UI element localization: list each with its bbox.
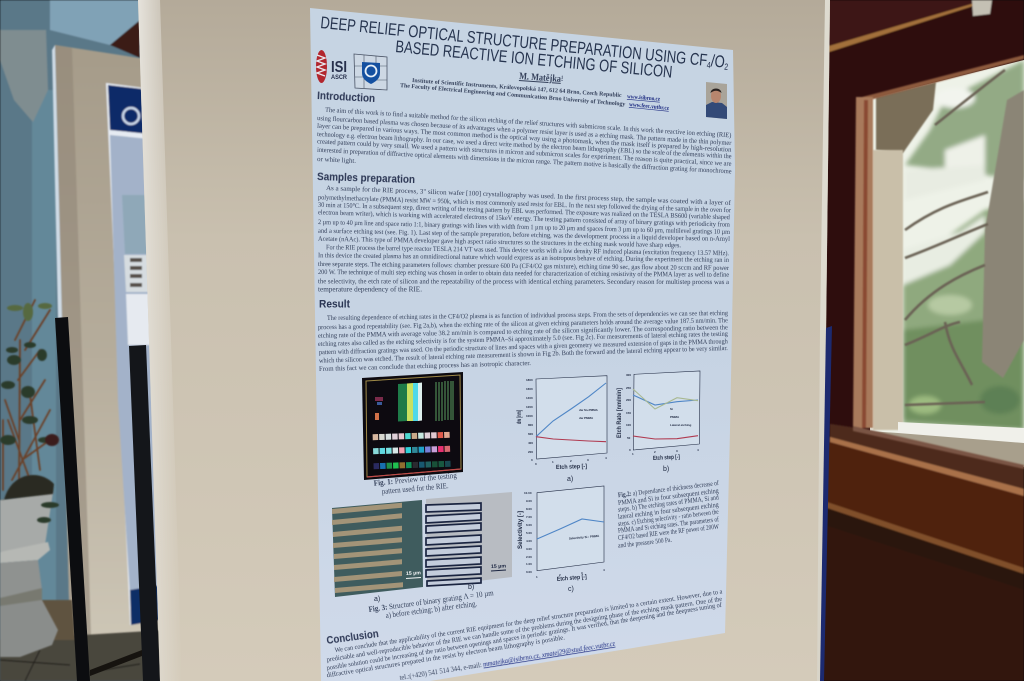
text: introduction: The aim of this work is to find a suitable method for the silicon etching of the relief structures with submicron scale. In this work the reactive ion etching (RIE) bbox=[325, 107, 732, 139]
figure 3 caption: Fig. 3: Structure of binary grating Λ = 10 µm bbox=[368, 588, 495, 614]
window view bbox=[870, 60, 1024, 467]
text: conclusion: diffractive optical structures prepared in the resist by electron beam lithography is possible. bbox=[326, 634, 566, 679]
figure 3a: before etching: 15 µm bbox=[406, 570, 422, 577]
contact line: tel.:(+420) 541 514 344, e-mail: mmatejka@isibrno.cz, xmatej29@stud.feec.vutbr.cz bbox=[399, 641, 616, 681]
affiliations: The Faculty of Electrical Engineering and Communication Brno University of Technology bbox=[400, 83, 626, 108]
figure 1 caption: Fig. 1: Preview of the testing bbox=[373, 471, 457, 488]
white sill bbox=[898, 422, 1024, 434]
logo: ISI ASCR: ASCR bbox=[331, 75, 348, 81]
second poster stand bbox=[52, 45, 165, 665]
chart c: selectivity: Selectivity [-] bbox=[518, 511, 524, 549]
chart a: thickness decrease: 1 bbox=[552, 460, 554, 464]
chart b: etching rates: 1 bbox=[632, 452, 634, 456]
chart a: thickness decrease: 1200 bbox=[526, 405, 533, 409]
chart c: selectivity: 7.00 bbox=[526, 515, 532, 519]
chart b: etching rates: PMMA bbox=[670, 415, 680, 419]
chart c: selectivity: 9.00 bbox=[526, 499, 532, 503]
chart a: thickness decrease: 1000 bbox=[526, 414, 533, 418]
heading: Conclusion: Conclusion bbox=[326, 628, 380, 647]
chart c: selectivity: 2.00 bbox=[526, 555, 532, 559]
logo: ISI ASCR bbox=[316, 50, 348, 83]
text: samples preparation: 2 µm up to 40 µm line and space ratio 1:1, binary gratings with lines with width from 1 µm up to 20 µm and spaces from 3 µm up to 60 µm, multilevel gratings 10 µm bbox=[318, 219, 731, 236]
figure 2 caption: steps. c) Etching selectivity - ratio between the bbox=[618, 508, 719, 528]
figure 2 caption: lateral etching in four subsequent etching bbox=[618, 501, 720, 521]
text: introduction: interested in preparation of diffractive optical elements with dimensions in the micron range. The pattern motive is basically the diffraction grating for monochrome bbox=[317, 147, 732, 175]
text: samples preparation: 30 min at 150°C. In a subsequent step, direct writing of the testing pattern by EBL was performed. The exposure was realized on the TESLA BS600 (variable shaped bbox=[318, 202, 731, 221]
chart b: etching rates: 100 bbox=[626, 423, 631, 427]
text: result: From this fact we can conclude that etching process has an isotropic character. bbox=[319, 360, 531, 373]
chart b: etching rates: 2 bbox=[654, 450, 656, 454]
right wooden wall bbox=[815, 0, 1024, 681]
figure 3 caption bbox=[368, 588, 495, 620]
text: result: process has a good repeatability (see. Fig 2a,b), when the etching rate of the silicon at given etching parameters holds around the average value 187.5 nm/min. The bbox=[318, 317, 728, 331]
logo: university bbox=[354, 54, 387, 90]
text: result: etching rate of the PMMA with average value 38.2 nm/min is compared to etching rate of the silicon significantly lower. The corresponding ratio between the bbox=[318, 324, 728, 340]
chart b: etching rates bbox=[617, 371, 700, 473]
chart c: selectivity: 1.00 bbox=[526, 562, 532, 566]
heading: Result: Result bbox=[319, 299, 350, 311]
chart a: thickness decrease: 0 bbox=[531, 458, 533, 462]
text: conclusion: We can conclude that the applicability of the current RIE equipment for the deep relief structure preparation is limited to a certain extent. However, due to a bbox=[334, 588, 723, 654]
poster sheet bbox=[310, 8, 735, 681]
main white panel bbox=[138, 0, 832, 681]
chart a: thickness decrease: 400 bbox=[528, 441, 533, 445]
chart b: etching rates: 300 bbox=[626, 373, 631, 377]
poster content bbox=[316, 13, 732, 681]
plant bbox=[0, 300, 59, 523]
chart b: etching rates: 200 bbox=[626, 398, 631, 402]
figure 1: test pattern bbox=[362, 372, 463, 480]
figure 2 caption: steps. b) The etching rates of PMMA, Si and bbox=[618, 493, 720, 514]
text: result: etching rates also called as the etching selectivity is for the system PMMA–Si approximately 5.0 (see. Fig 2c). For measurements of lateral etching rates the testing bbox=[318, 331, 728, 348]
text: samples preparation: and a surface etching test (see. Fig. 1). Last step of the sample preparation, before etching, was the development process in a liquid developer based on n-Amyl bbox=[318, 228, 730, 243]
chart a: thickness decrease: 3 bbox=[587, 458, 589, 462]
author: 1 bbox=[561, 76, 564, 81]
text: samples preparation: temperature dependency of the RIE. bbox=[318, 287, 422, 294]
poster behind bbox=[106, 83, 160, 625]
text: result: The resulting dependence of etching rates in the CF4/O2 plasma is as function of individual process steps. From the sets of dependencies we can see that etching bbox=[327, 310, 729, 322]
figure 2 caption: and the pressure 500 Pa. bbox=[618, 536, 672, 550]
chart c: selectivity: 2 bbox=[559, 573, 561, 577]
affiliations: www.feec.vutbr.cz bbox=[629, 102, 669, 112]
text: conclusion: predictable and well-reproducible behavior of the RIE we can handle some of the problems during the designing phase of the etching mask pattern. One of the bbox=[326, 596, 723, 664]
window sill bbox=[830, 436, 1024, 496]
figure 3b: after etching bbox=[426, 492, 512, 587]
text: introduction bbox=[317, 107, 732, 175]
chart a: thickness decrease: Etch step [-] bbox=[556, 464, 587, 471]
chart b: etching rates: 0 bbox=[629, 448, 631, 452]
figure 3 sub-labels: b) bbox=[468, 584, 474, 591]
title: /O bbox=[710, 51, 726, 72]
chart a: thickness decrease: 600 bbox=[528, 432, 533, 436]
author photo bbox=[706, 82, 727, 119]
title: 2 bbox=[724, 62, 729, 72]
text: samples preparation: As a sample for the RIE process, 3" silicon wafer [100] crystallography was used. In the first process step, the sample was coated with a layer of bbox=[326, 185, 732, 207]
chart a: thickness decrease: 200 bbox=[528, 450, 533, 454]
text: conclusion: possible solution could be increasing of the ratio between openings and spaces in periodic gratings. It was verified, that the deepening and the deepness tuning of bbox=[326, 602, 723, 672]
chart b: etching rates: Lateral etching bbox=[670, 423, 692, 427]
chart b: etching rates: 150 bbox=[626, 411, 631, 415]
figure 3a: before etching bbox=[332, 500, 423, 597]
text: samples preparation: the selectivity, the etch rate of silicon and the repeatability of the process with identical etching parameters. Secondary reason for multistep process was a bbox=[318, 278, 729, 286]
chart c: selectivity: 0.00 bbox=[526, 570, 532, 574]
chart a: thickness decrease: 1800 bbox=[526, 378, 533, 382]
text: introduction: technology e.g. electron beam lithography. In our case, we used a direct write method by the electron beam lithography (EBL) so the scale of the elements within the bbox=[317, 131, 732, 160]
figure 1 caption bbox=[373, 471, 457, 496]
text: samples preparation: Acetate (nAAc). This type of PMMA developer gave high aspect ratio structures so the structures in the etching mask would have sharp edges. bbox=[318, 236, 681, 249]
chart a: thickness decrease: 0 bbox=[535, 462, 537, 466]
text: introduction: or white light. bbox=[317, 156, 357, 165]
text: result: which the silicon was etched. The result of lateral etching rate measurement is shown in Fig 2b. Both the forward and the lateral etching appear to be very similar. bbox=[319, 345, 728, 365]
chart a: thickness decrease: 800 bbox=[528, 423, 533, 427]
affiliations: www.isibrno.cz bbox=[627, 94, 661, 103]
concrete column bbox=[873, 150, 903, 430]
chart c: selectivity: 5.00 bbox=[526, 531, 532, 535]
lower wood bbox=[815, 437, 1024, 681]
chart c: selectivity bbox=[518, 486, 605, 593]
chart c: selectivity: Selectivity Si : PMMA bbox=[569, 534, 600, 540]
text: samples preparation: 200 W. The technique of multi step etching was chosen in order to obtain data needed for characterization of etching resistivity of the PMMA layer as well to define bbox=[318, 269, 729, 279]
text: result: pattern with diffraction gratings was used. On the periodic structure of lines and spaces with a given geometry we measured extension of gaps in the PMMA through bbox=[319, 338, 728, 356]
figure 3 sub-labels: a) bbox=[374, 596, 380, 603]
chart c: selectivity: 4 bbox=[603, 568, 605, 572]
text: samples preparation: polymethylmethacrylate (PMMA) resist MW = 950k, which is most commonly used resist for EBL. In the next step followed the drying of the sample in the oven for bbox=[318, 194, 732, 214]
chart a: thickness decrease: dw [nm] bbox=[517, 410, 523, 424]
chart b: etching rates: 50 bbox=[627, 436, 631, 440]
text: introduction: using flourcarbon based plasma was chosen because of its advantages when a polymer resist layer is used as a etching mask. The pattern made in the thin polymer bbox=[317, 115, 732, 147]
figure 2 caption: CF4/O2 based RIE were the RF power of 200W bbox=[618, 523, 720, 542]
chart b: etching rates: 4 bbox=[697, 448, 699, 452]
stand posts bbox=[55, 317, 160, 681]
chart c: selectivity: 4.00 bbox=[526, 539, 532, 543]
chart a: thickness decrease: 4 bbox=[605, 456, 607, 460]
figure 1 caption: pattern used for the RIE. bbox=[381, 481, 449, 496]
title: DEEP RELIEF OPTICAL STRUCTURE PREPARATION USING CF bbox=[320, 13, 826, 81]
figure 3b: after etching: 15 µm bbox=[491, 563, 507, 570]
chart c: selectivity: 3.00 bbox=[526, 547, 532, 551]
chart c: selectivity: 10.00 bbox=[524, 491, 532, 495]
text: result bbox=[318, 310, 729, 373]
text: introduction: created pattern could by very small. We used a pattern with structures in micron and submicron scales for experiment. The reason is quite practical, since we are bbox=[317, 138, 732, 168]
chart c: selectivity: Etch step [-] bbox=[557, 574, 587, 583]
chart b: etching rates: Etch Rate [nm/min] bbox=[617, 388, 623, 438]
chart c: selectivity: 8.00 bbox=[526, 507, 532, 511]
chart a: thickness decrease: 1400 bbox=[526, 396, 533, 400]
heading: Samples preparation: Samples preparation bbox=[317, 171, 415, 186]
chart a: thickness decrease: dw Si+PMMA bbox=[579, 408, 599, 412]
title: 4 bbox=[706, 60, 711, 70]
concrete head bbox=[876, 82, 936, 153]
chart c: selectivity: 1 bbox=[536, 575, 538, 579]
tree trunk bbox=[982, 90, 1024, 378]
figure 3 caption: a) before etching; b) after etching. bbox=[385, 599, 477, 620]
logo: ISI ASCR: ISI bbox=[331, 59, 347, 76]
chart a: thickness decrease: 1600 bbox=[526, 387, 533, 391]
chart c: selectivity: 6.00 bbox=[526, 523, 532, 527]
chart b: etching rates: 3 bbox=[676, 449, 678, 453]
wall bracket bbox=[0, 30, 48, 122]
figure 2 caption bbox=[618, 479, 720, 550]
chart a: thickness decrease: dw PMMA bbox=[579, 416, 594, 420]
figure 3 sub-labels bbox=[374, 584, 474, 603]
text: introduction: layer can be prepared in various ways. The most common method is the optical way using a photomask, when the mask itself is prepared by high-resolution bbox=[317, 123, 732, 154]
heading: Introduction: Introduction bbox=[317, 90, 376, 105]
chart b: etching rates: 250 bbox=[626, 386, 631, 390]
affiliations bbox=[400, 78, 669, 112]
text: samples preparation: For the RIE process the barrel type reactor TESLA 214 VT was used. This device works with a low density RF induced plasma (excitation frequency 13.57 MHz). bbox=[326, 244, 729, 257]
floor bbox=[0, 600, 165, 681]
text: samples preparation: In this device the created plasma has an omnidirectional nature which would express as an isotropous behave of etching. During the experiment the etching ran in bbox=[318, 252, 730, 264]
title: BASED REACTIVE ION ETCHING OF SILICON bbox=[395, 37, 673, 82]
beam bbox=[829, 0, 992, 52]
author: M. Matějka bbox=[519, 71, 570, 85]
chart c: selectivity: 3 bbox=[581, 571, 583, 575]
chart a: thickness decrease: 2 bbox=[570, 459, 572, 463]
text: samples preparation: three separate steps. The etching parameters follows: chamber pressure 600 Pa (CF4/O2 gas mixture), etching time 90 sec, gas flow about 20 sccm and RF power bbox=[318, 261, 730, 272]
chart b: etching rates: Si bbox=[670, 407, 673, 411]
figure 2 caption: PMMA and Si in four subsequent etching bbox=[618, 487, 720, 507]
chart a: thickness decrease: a) bbox=[567, 476, 573, 483]
left background wall bbox=[0, 0, 165, 681]
affiliations: Institute of Scientific Instruments, Královopolská 147, 612 64 Brno, Czech Republic bbox=[412, 78, 622, 99]
chart a: thickness decrease bbox=[517, 376, 607, 483]
chart b: etching rates: b) bbox=[663, 466, 669, 473]
text: samples preparation bbox=[318, 185, 732, 294]
chart b: etching rates: Etch step [-] bbox=[653, 455, 680, 462]
window frame bbox=[853, 55, 1024, 469]
figure 2 caption: PMMA and Si etching rates. The parameters of bbox=[618, 515, 720, 535]
figure 2 caption: Fig.2: a) Dependance of thickness decrease of bbox=[618, 479, 720, 499]
chart c: selectivity: c) bbox=[568, 586, 574, 593]
text: samples preparation: electron beam writer), which is working with accelerated electrons of 15keV energy. The testing pattern consisted of array of binary gratings with periodicity from bbox=[318, 209, 731, 229]
plant pot bbox=[0, 492, 58, 657]
